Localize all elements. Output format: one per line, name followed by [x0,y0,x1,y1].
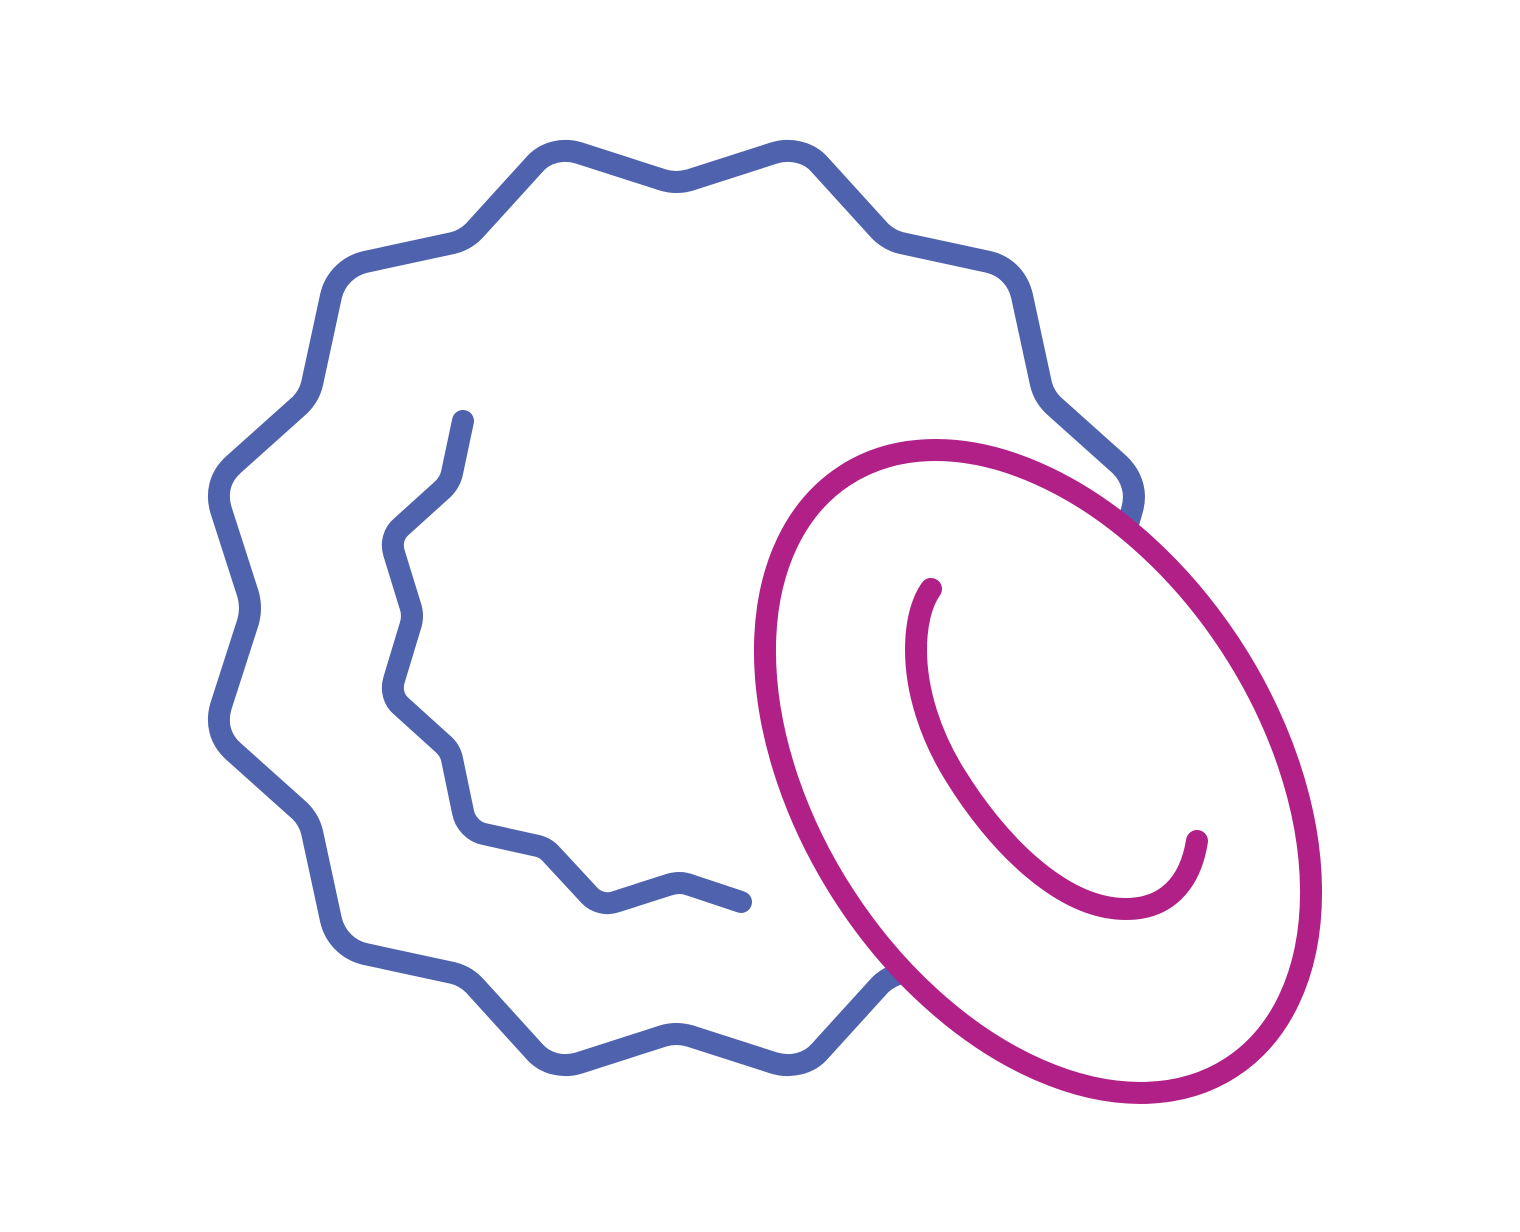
icon: inner blue contour line [393,421,741,903]
icon: magenta inner curve [916,589,1197,909]
icon: magenta tilted ellipse [652,350,1424,1193]
icon: scalloped blue cell outline [219,151,1134,1065]
